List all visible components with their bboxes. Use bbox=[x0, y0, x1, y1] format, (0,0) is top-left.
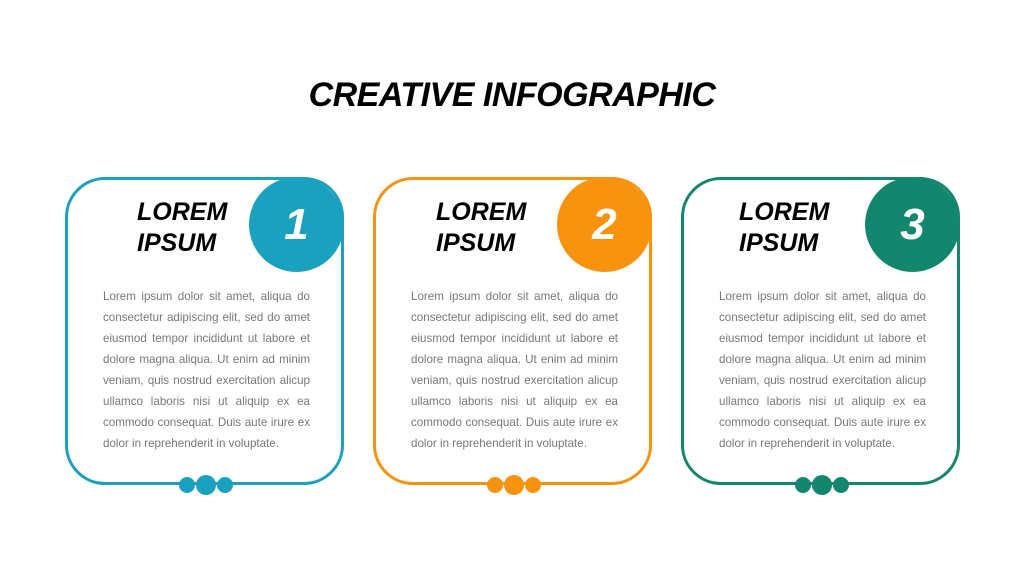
dots 3 bbox=[795, 475, 849, 495]
body text 3: Lorem ipsum dolor sit amet, aliqua do consectetur adipiscing elit, sed do amet eiusmod tempor incididunt ut labore et dolore magna aliqua. Ut enim ad minim veniam, quis nostrud exercitation alicup ullamco laboris nisi ut aliquip ex ea commodo consequat. Duis aute irure ex dolor in reprehenderit in voluptate. bbox=[719, 290, 926, 450]
body text 1: Lorem ipsum dolor sit amet, aliqua do consectetur adipiscing elit, sed do amet eiusmod tempor incididunt ut labore et dolore magna aliqua. Ut enim ad minim veniam, quis nostrud exercitation alicup ullamco laboris nisi ut aliquip ex ea commodo consequat. Duis aute irure ex dolor in reprehenderit in voluptate. bbox=[103, 290, 310, 450]
heading 3 bbox=[739, 198, 830, 257]
dots 2 bbox=[487, 475, 541, 495]
icon: number 2 circle: 2 bbox=[592, 200, 617, 249]
panel: card 3 bbox=[681, 177, 960, 485]
heading 1 bbox=[137, 198, 228, 257]
heading 2: LOREM bbox=[436, 198, 526, 226]
dots 1 bbox=[179, 475, 233, 495]
icon: number 2 circle bbox=[557, 177, 652, 272]
icon: number 1 circle: 1 bbox=[284, 200, 309, 249]
heading 1: IPSUM bbox=[137, 229, 216, 257]
icon: number 1 circle bbox=[249, 177, 344, 272]
icon: number 3 circle: 3 bbox=[900, 200, 925, 249]
panel: card 1 bbox=[65, 177, 344, 485]
heading 2: IPSUM bbox=[436, 229, 515, 257]
heading 2 bbox=[436, 198, 527, 257]
title: CREATIVE INFOGRAPHIC bbox=[309, 76, 715, 114]
panel: card 2 bbox=[373, 177, 652, 485]
icon: number 3 circle bbox=[865, 177, 960, 272]
heading 3: IPSUM bbox=[739, 229, 818, 257]
body text 2: Lorem ipsum dolor sit amet, aliqua do consectetur adipiscing elit, sed do amet eiusmod tempor incididunt ut labore et dolore magna aliqua. Ut enim ad minim veniam, quis nostrud exercitation alicup ullamco laboris nisi ut aliquip ex ea commodo consequat. Duis aute irure ex dolor in reprehenderit in voluptate. bbox=[411, 290, 618, 450]
heading 1: LOREM bbox=[137, 198, 227, 226]
heading 3: LOREM bbox=[739, 198, 829, 226]
